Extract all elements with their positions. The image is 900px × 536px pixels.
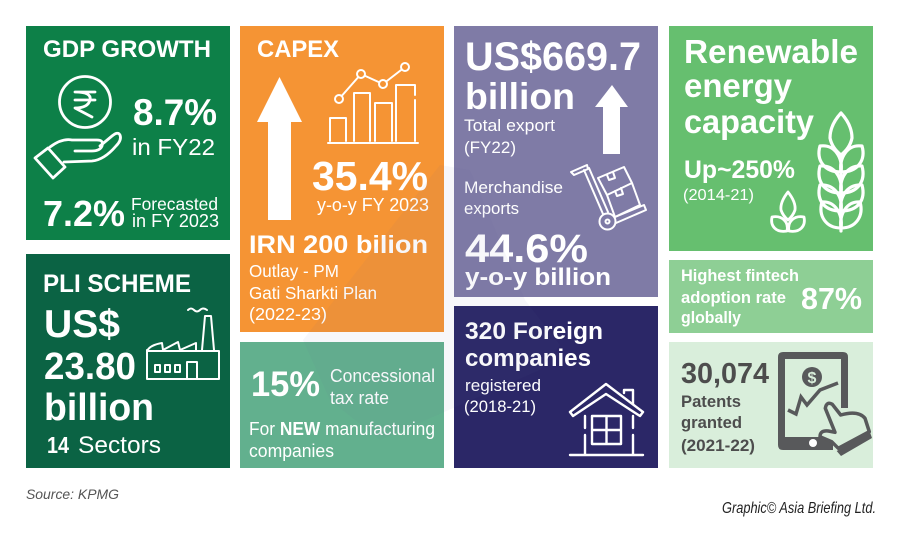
stat: up 250 percent: Up~250% [684, 156, 795, 184]
text: Gati Sharkti outlay [249, 261, 377, 324]
panel: CAPEX [240, 26, 444, 332]
stat: 8.7 percent: 8.7% [133, 92, 217, 133]
icon: hand truck [571, 165, 646, 230]
panel: patents [669, 342, 873, 468]
label: 14 sectors: 14 [47, 432, 69, 458]
heading: GDP growth: GDP GROWTH [43, 36, 211, 63]
stat: US$ 23.80 billion: US$ [44, 303, 120, 346]
text: Gati Sharkti outlay: Outlay - PM [249, 261, 339, 281]
heading: renewable energy capacity: capacity [684, 103, 815, 140]
icon: tablet with hand: $ [808, 370, 817, 387]
stat: IRN 200 billion: IRN 200 bilion [249, 231, 428, 259]
label: 2014-21: (2014-21) [683, 187, 754, 204]
icon: wheat [819, 113, 863, 231]
stat: 87 percent: 87% [801, 281, 862, 316]
text: highest fintech adoption: Highest fintech [681, 267, 799, 285]
text: highest fintech adoption [681, 267, 799, 327]
source note: Source: KPMG [26, 486, 119, 502]
heading: PLI scheme: PLI SCHEME [43, 270, 191, 298]
stat: 35.4 percent: 35.4% [312, 153, 428, 199]
stat: US$669.7 billion: billion [465, 75, 575, 117]
text: Gati Sharkti outlay: Gati Sharkti Plan [249, 283, 377, 303]
label: forecasted: Forecasted [131, 194, 218, 214]
text: concessional tax rate [330, 366, 435, 408]
text: highest fintech adoption: adoption rate [681, 289, 786, 307]
heading: renewable energy capacity: Renewable [684, 33, 858, 70]
text: total export [464, 116, 555, 157]
label: 14 sectors: Sectors [78, 432, 161, 459]
panel: foreign companies [454, 306, 658, 468]
text: merchandise exports: exports [464, 200, 519, 218]
panel: renewable energy [669, 26, 873, 251]
panel: fintech adoption [669, 260, 873, 333]
heading: 320 foreign companies: companies [465, 345, 591, 372]
text: registered: registered [465, 376, 541, 395]
text: concessional tax rate: tax rate [330, 388, 389, 408]
text: new manufacturing companies: companies [249, 441, 334, 461]
text: patents granted: Patents [681, 392, 741, 411]
stat: US$ 23.80 billion: 23.80 [44, 346, 136, 388]
icon: tablet with hand [778, 352, 872, 456]
icon: sprout [772, 192, 804, 231]
icon: factory [147, 308, 219, 379]
text: patents granted [681, 392, 755, 455]
watermark [303, 165, 560, 440]
text: new manufacturing companies [249, 419, 435, 461]
label: y-o-y FY 2023: y-o-y FY 2023 [317, 195, 429, 215]
text: new manufacturing companies: For NEW manufacturing [249, 419, 435, 439]
panel: GDP growth [26, 26, 230, 240]
panel: exports [454, 26, 658, 297]
panel: PLI scheme [26, 254, 230, 468]
text: Gati Sharkti outlay: (2022-23) [249, 304, 327, 324]
text: highest fintech adoption: globally [681, 309, 742, 327]
text: merchandise exports: Merchandise [464, 179, 563, 197]
arrow: up [257, 77, 302, 220]
text: registered: (2018-21) [464, 397, 536, 416]
heading: 320 foreign companies: 320 Foreign [465, 318, 603, 345]
stat: 44.6 percent: 44.6% [465, 227, 588, 271]
label: y-o-y billion: y-o-y billion [465, 264, 611, 291]
text: registered [464, 376, 541, 416]
label: in FY 2023: in FY 2023 [132, 211, 219, 231]
text: merchandise exports [464, 179, 563, 218]
text: concessional tax rate: Concessional [330, 366, 435, 386]
panel: concessional tax [240, 342, 444, 468]
heading: renewable energy capacity [684, 33, 858, 140]
label: in FY22: in FY22 [132, 134, 215, 160]
text: patents granted: (2021-22) [681, 436, 755, 455]
heading: renewable energy capacity: energy [684, 67, 793, 104]
stat: US$ 23.80 billion: billion [44, 387, 154, 429]
icon: house [570, 384, 643, 455]
text: patents granted: granted [681, 413, 742, 432]
heading: CAPEX: CAPEX [257, 36, 339, 63]
arrow: up [595, 85, 628, 154]
stat: 15 percent: 15% [251, 365, 320, 404]
text: total export: (FY22) [464, 138, 516, 157]
stat: US$ 23.80 billion [44, 303, 154, 429]
stat: US$669.7 billion: US$669.7 [465, 35, 641, 79]
stat: 30,074: 30,074 [681, 358, 769, 390]
stat: 7.2 percent: 7.2% [43, 193, 125, 234]
heading: 320 foreign companies [465, 318, 603, 372]
stat: US$669.7 billion [465, 35, 641, 117]
text: total export: Total export [464, 116, 555, 135]
icon: rupee in hand [35, 76, 120, 178]
icon: bar and line chart [328, 63, 418, 143]
